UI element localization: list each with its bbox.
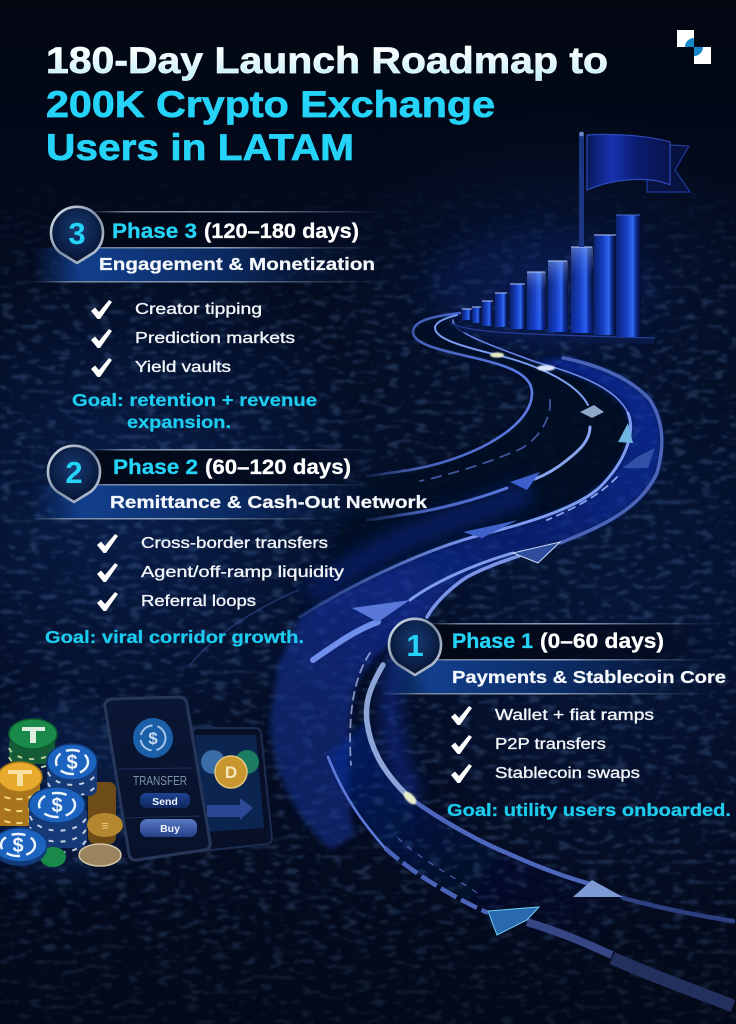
panel: phase 1 <box>380 619 736 820</box>
illustration: phone: $ <box>148 729 158 748</box>
green stack <box>9 719 57 768</box>
checklist: phase 2: Agent/off-ramp liquidity <box>141 564 344 581</box>
subheading: phase 1: Payments & Stablecoin Core <box>452 667 726 687</box>
illustration: tablet: D <box>225 763 237 782</box>
icon: pin 1 <box>389 619 441 675</box>
illustration: phone: Send <box>152 796 178 808</box>
panel: phase 3 <box>30 207 390 432</box>
title: 200K Crypto Exchange <box>46 84 495 125</box>
illustration: phone: TRANSFER <box>133 773 187 788</box>
blue stack back: $ <box>66 752 78 774</box>
dates: phase 2: (60–120 days) <box>205 456 351 479</box>
heading: phase 3: Phase 3 <box>112 220 197 243</box>
loose coins <box>0 828 121 867</box>
dates: phase 1: (0–60 days) <box>540 630 664 653</box>
blue stack front: $ <box>51 795 63 817</box>
icon: flag on pole <box>579 132 690 247</box>
dates: phase 3: (120–180 days) <box>204 220 359 243</box>
icon: pin 3 <box>51 207 103 263</box>
roadway <box>190 313 733 1007</box>
right gold stack <box>87 782 123 844</box>
gold stack <box>0 762 42 826</box>
checklist: phase 3 <box>91 300 295 377</box>
goal: phase 3 <box>72 390 317 432</box>
checklist: phase 2 <box>97 534 344 611</box>
panel: phase 2 <box>30 446 427 647</box>
illustration: tablet <box>193 728 272 850</box>
checklist: phase 3: Yield vaults <box>135 359 231 376</box>
checklist: phase 1: P2P transfers <box>495 736 606 753</box>
checklist: phase 3: Prediction markets <box>135 330 295 347</box>
icon: pin 1: 1 <box>406 628 424 663</box>
heading: phase 2: Phase 2 <box>113 456 198 479</box>
icon: pin 2: 2 <box>65 455 83 490</box>
illustration: coin stacks <box>0 705 145 875</box>
heading: phase 1: Phase 1 <box>452 630 533 653</box>
checklist: phase 1: Wallet + fiat ramps <box>495 707 654 724</box>
goal: phase 2: Goal: viral corridor growth. <box>45 627 304 647</box>
road direction markers <box>352 352 655 935</box>
subheading: phase 3: Engagement & Monetization <box>99 254 375 274</box>
title: 180-Day Launch Roadmap to <box>46 40 608 81</box>
checklist: phase 3: Creator tipping <box>135 301 262 318</box>
blue stack back <box>47 744 97 796</box>
right gold stack: ≡ <box>101 818 109 833</box>
dark road surface <box>300 313 631 617</box>
illustration: phone: Buy <box>160 823 180 835</box>
goal: phase 3: Goal: retention + revenue <box>72 390 317 410</box>
title <box>46 40 608 168</box>
icon: logo <box>677 30 711 64</box>
title: Users in LATAM <box>46 127 354 168</box>
blue stack front <box>29 787 87 853</box>
checklist: phase 2: Cross-border transfers <box>141 535 328 552</box>
icon: pin 3: 3 <box>68 216 86 251</box>
goal: phase 1: Goal: utility users onboarded. <box>447 800 731 820</box>
icon: pin 2 <box>48 446 100 502</box>
checklist: phase 1 <box>451 706 654 783</box>
loose coins: $ <box>12 835 24 857</box>
goal: phase 3: expansion. <box>127 412 231 432</box>
road edge lines <box>190 313 733 1006</box>
checklist: phase 2: Referral loops <box>141 593 256 610</box>
subheading: phase 2: Remittance & Cash-Out Network <box>110 492 427 512</box>
chart: growth bars with platform <box>430 215 655 350</box>
illustration: phone <box>105 697 210 860</box>
checklist: phase 1: Stablecoin swaps <box>495 765 640 782</box>
